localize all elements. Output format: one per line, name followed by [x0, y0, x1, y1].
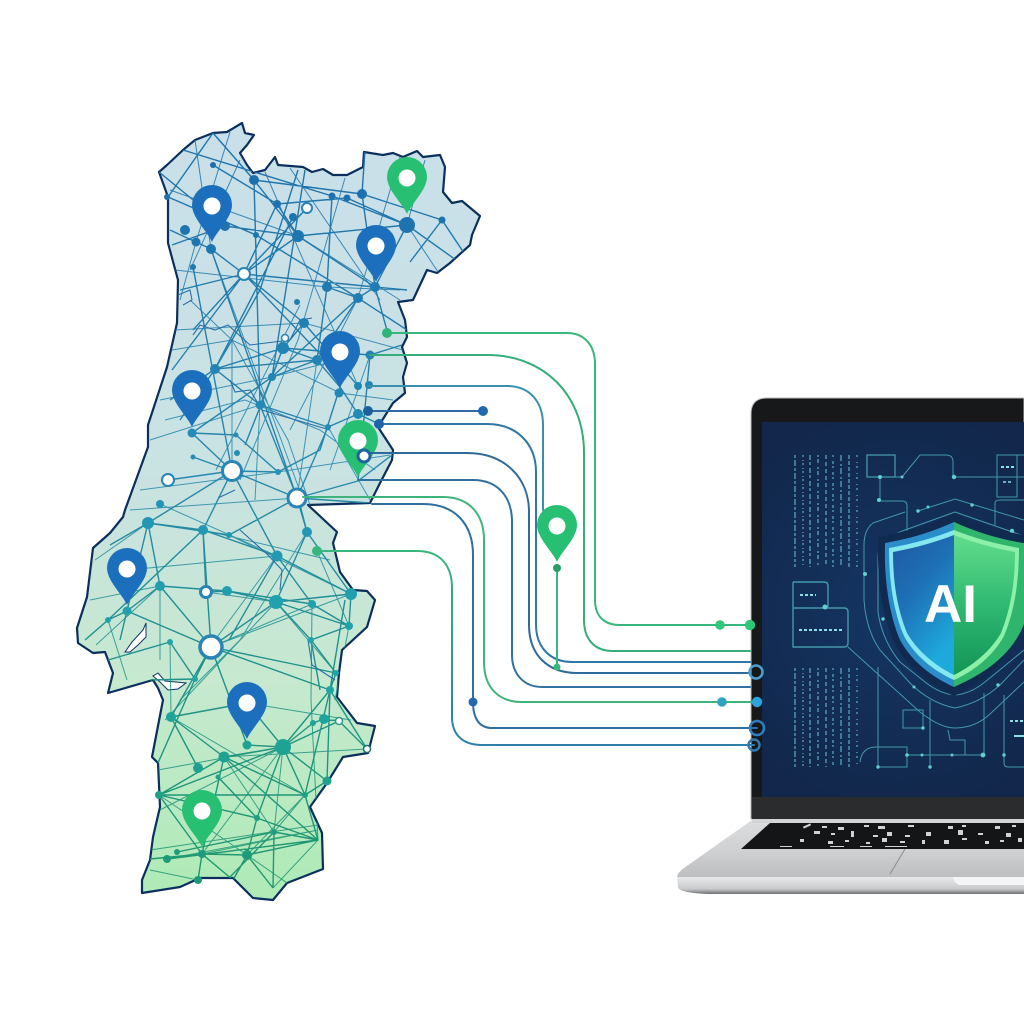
connector 8: [372, 504, 757, 728]
connector 6: [358, 480, 750, 687]
location pin: green border: [338, 420, 378, 477]
shield outer rim right: [954, 522, 1024, 687]
infographic canvas: [76, 122, 1024, 902]
short connector end dot: [478, 406, 488, 416]
bend dot: [468, 698, 478, 706]
location pin: blue Lisbon: [107, 548, 147, 605]
shield face left: [893, 535, 954, 675]
connector lines from map to laptop: [303, 328, 764, 750]
location pin: blue north: [356, 225, 396, 282]
connector 2: [370, 355, 750, 651]
location pin: green floating: [537, 505, 577, 572]
laptop front edge: [677, 877, 1024, 894]
connector 4: [379, 424, 750, 662]
shield dark halo: [878, 513, 1024, 696]
tiny screen labels: [799, 467, 1024, 736]
port ring: [748, 740, 760, 750]
shield label: AI: [924, 575, 977, 634]
shield outer rim left: [885, 522, 954, 687]
location pin: blue north-west: [192, 185, 232, 242]
keyboard: [741, 823, 1024, 849]
border hollow node: [358, 450, 370, 462]
location pin: green north-east: [387, 157, 427, 214]
shield inner border left: [889, 530, 954, 680]
connector 9: [317, 551, 754, 745]
circuit traces: [793, 455, 1024, 767]
location pin: blue centre: [320, 331, 360, 388]
pin stem connector: [556, 568, 558, 667]
trackpad edge: [890, 849, 905, 874]
connector 5: [365, 453, 750, 673]
location pin: green Algarve: [182, 790, 222, 847]
district boundary strokes: [178, 290, 335, 680]
connector start dots: [312, 328, 392, 556]
port dots green: [715, 620, 755, 630]
estuary cut-outs: [125, 623, 186, 690]
short connector with end dot: [368, 410, 483, 412]
location pin: blue coast: [172, 370, 212, 427]
connector 7: [303, 497, 757, 702]
junction dot: [554, 664, 560, 670]
shield face right: [954, 535, 1015, 675]
laptop hinge strip: [752, 819, 1024, 823]
laptop base deck: [677, 820, 1024, 877]
port dots blue: [717, 697, 762, 707]
shield inner border right: [954, 530, 1019, 680]
port ring: [750, 666, 762, 678]
AI shield: [878, 513, 1024, 696]
laptop: [677, 398, 1024, 894]
port ring: [750, 721, 764, 735]
circuit dots: [822, 475, 1014, 769]
connector 3: [368, 386, 543, 510]
network edges: [85, 133, 470, 888]
data columns: [795, 455, 857, 767]
secondary network edges: [90, 132, 440, 888]
hollow hub nodes: [162, 203, 370, 752]
laptop lower bezel: [752, 797, 1024, 820]
location pin: blue south: [227, 682, 267, 739]
keyboard key highlights: [780, 823, 1022, 847]
network nodes: [105, 162, 446, 884]
map outline and fill: [77, 123, 480, 900]
trackpad notch: [953, 877, 1024, 885]
laptop lid and bezel: [751, 398, 1024, 819]
connector 1: [387, 333, 750, 625]
laptop screen: [762, 422, 1024, 797]
map of Portugal with network: [77, 123, 480, 900]
